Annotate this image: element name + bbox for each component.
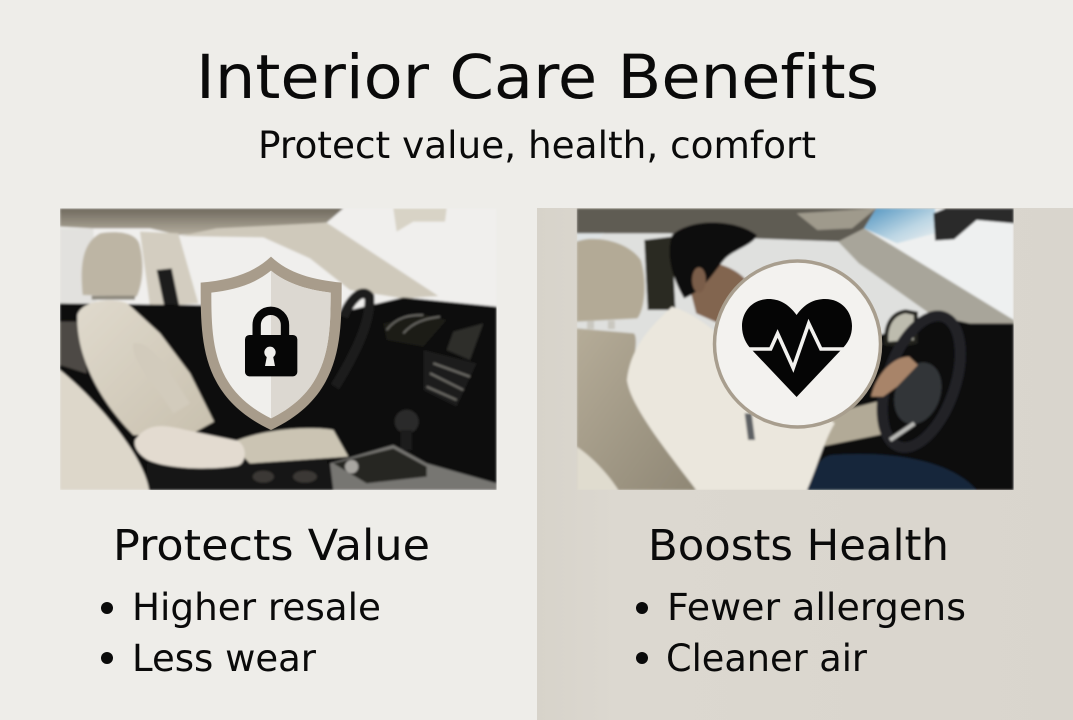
text block: boosts health bbox=[636, 521, 966, 680]
photo: empty car interior bbox=[60, 208, 497, 490]
icon: heart with pulse in circle bbox=[714, 261, 880, 427]
bullet: less wear: Less wear bbox=[132, 637, 317, 680]
title: Interior Care Benefits bbox=[196, 42, 879, 113]
subtitle: Protect value, health, comfort bbox=[258, 124, 816, 167]
photo: driver at wheel bbox=[577, 208, 1014, 490]
text block: protects value bbox=[101, 521, 430, 680]
bullet: fewer allergens: Fewer allergens bbox=[667, 586, 966, 629]
right column panel bbox=[537, 208, 1073, 720]
icon: shield with padlock bbox=[201, 257, 342, 430]
bullet: cleaner air: Cleaner air bbox=[666, 637, 868, 680]
heading: protects value: Protects Value bbox=[113, 521, 430, 571]
bullet: higher resale: Higher resale bbox=[132, 586, 381, 629]
panel: car interior photo with shield bbox=[60, 208, 497, 490]
panel: driver photo with heart bbox=[577, 208, 1014, 490]
heading: boosts health: Boosts Health bbox=[648, 521, 949, 571]
